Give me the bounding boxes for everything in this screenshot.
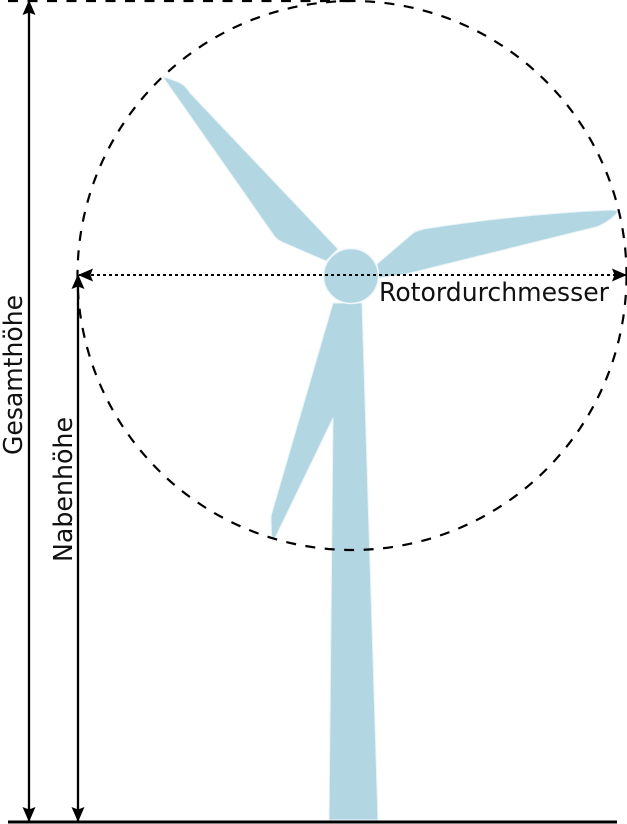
upper left blade xyxy=(163,77,338,261)
top reference line xyxy=(8,0,350,2)
rotor hub xyxy=(324,248,378,304)
rotor diameter arrow xyxy=(79,274,626,276)
tower and lower blade xyxy=(271,303,378,820)
label: rotor diameter: Rotordurchmesser xyxy=(379,278,609,308)
turbine xyxy=(163,77,618,820)
ground line xyxy=(8,820,617,824)
right blade xyxy=(377,210,618,278)
hub height arrow xyxy=(77,275,79,821)
total height arrow xyxy=(28,1,30,821)
label: hub height: Nabenhöhe xyxy=(49,417,79,562)
rotor circle xyxy=(78,1,626,550)
